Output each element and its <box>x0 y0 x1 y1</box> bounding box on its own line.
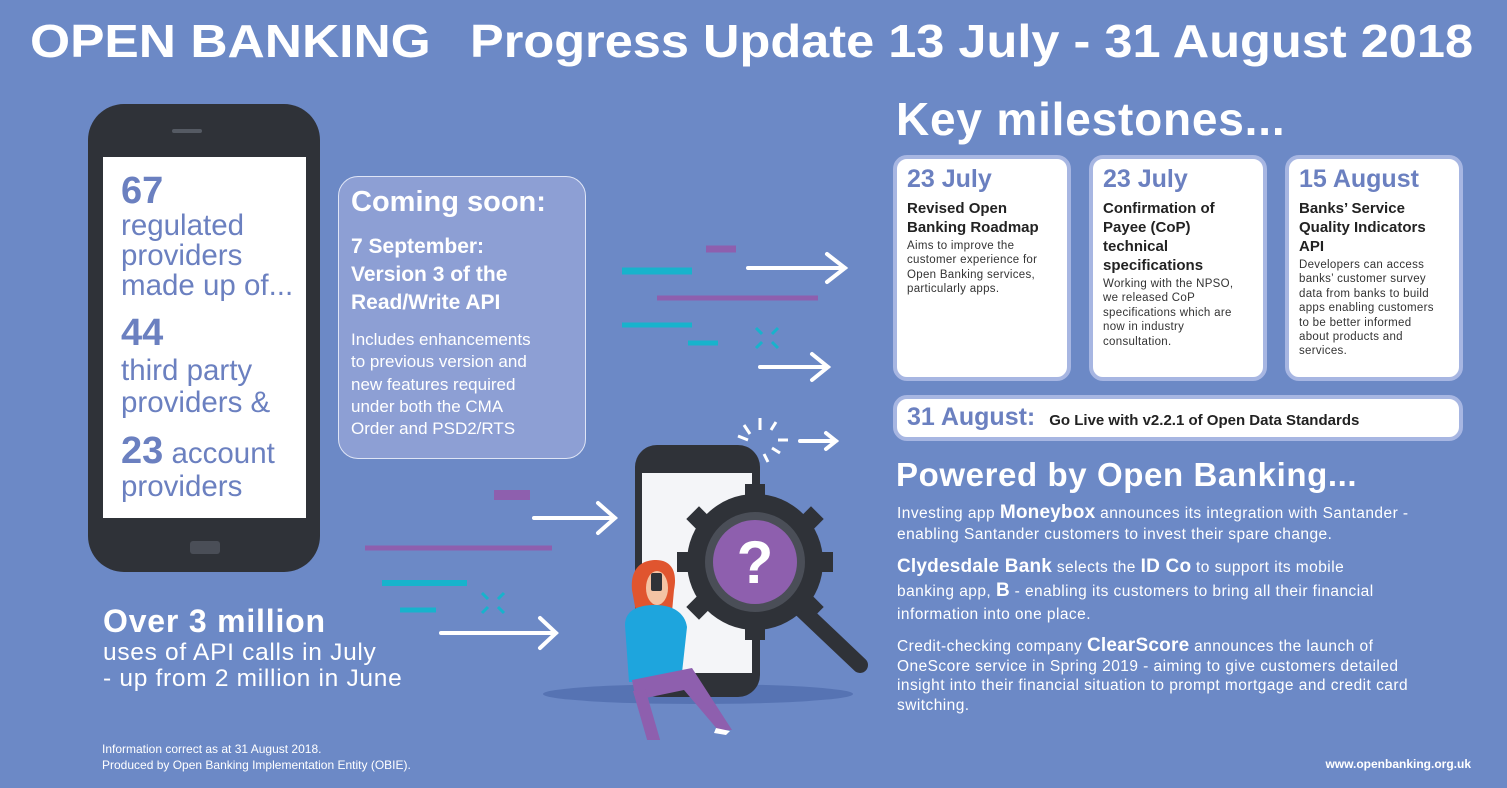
panel: coming soon <box>338 176 586 459</box>
text: powered by items <box>897 502 1409 714</box>
card: 23 July CoP: Payee (CoP) <box>1103 219 1191 236</box>
text: powered by items: enabling Santander customers to invest their spare change. <box>897 526 1332 543</box>
panel: coming soon: Order and PSD2/RTS <box>351 419 515 438</box>
card: 23 July roadmap: Aims to improve the <box>907 240 1014 252</box>
card: 15 August: 15 August <box>1299 165 1419 193</box>
stats text: 44 <box>121 312 163 354</box>
card: 15 August: data from banks to build <box>1299 288 1429 300</box>
panel: coming soon: under both the CMA <box>351 397 503 416</box>
footer note: Produced by Open Banking Implementation Entity (OBIE). <box>102 758 411 772</box>
stat: over 3 million: uses of API calls in July <box>103 639 377 666</box>
stat: over 3 million <box>103 603 402 692</box>
card: 23 July roadmap: customer experience for <box>907 254 1037 266</box>
stats text: 23 account <box>121 430 275 472</box>
card: 23 July roadmap: Open Banking services, <box>907 269 1035 281</box>
card: 15 August: to be better informed <box>1299 317 1411 329</box>
card: 15 August: Quality Indicators <box>1299 219 1426 236</box>
card: 15 August: banks’ customer survey <box>1299 273 1426 285</box>
stats text: providers <box>121 470 242 503</box>
text: powered by items: banking app, B - enabling its customers to bring all their financial <box>897 580 1374 601</box>
stat: over 3 million: - up from 2 million in June <box>103 665 402 692</box>
card: 23 July roadmap <box>893 155 1071 381</box>
panel: coming soon: Version 3 of the <box>351 263 507 286</box>
card: 23 July CoP: 23 July <box>1103 165 1188 193</box>
card: 15 August: apps enabling customers <box>1299 302 1434 314</box>
card: 15 August: Developers can access <box>1299 259 1424 271</box>
card: 31 August <box>893 395 1463 441</box>
stats text: providers & <box>121 386 270 419</box>
card: 23 July CoP: specifications <box>1103 257 1203 274</box>
stats text: 67 <box>121 170 163 212</box>
text: powered by items: Clydesdale Bank selects the ID Co to support its mobile <box>897 556 1344 577</box>
text: powered by items: Investing app Moneybox announces its integration with Santander - <box>897 502 1409 523</box>
title: OPEN BANKING <box>30 15 431 67</box>
card: 23 July roadmap: particularly apps. <box>907 283 999 295</box>
card: 23 July roadmap: 23 July <box>907 165 992 193</box>
panel: coming soon: to previous version and <box>351 352 527 371</box>
card: 15 August: Banks’ Service <box>1299 200 1405 217</box>
text: powered by items: Credit-checking company ClearScore announces the launch of <box>897 635 1373 656</box>
card: 31 August: 31 August: Go Live with v2.2.1 of Open Data Standards <box>907 403 1359 431</box>
card: 23 July CoP: technical <box>1103 238 1168 255</box>
stats text: third party <box>121 354 252 387</box>
card: 15 August: about products and <box>1299 331 1403 343</box>
title <box>30 15 1473 67</box>
panel: coming soon: Read/Write API <box>351 291 500 314</box>
card: 15 August: services. <box>1299 345 1347 357</box>
card: 23 July CoP: now in industry <box>1103 321 1184 333</box>
card: 23 July CoP <box>1089 155 1267 381</box>
stats text: made up of... <box>121 269 293 302</box>
card: 23 July CoP: specifications which are <box>1103 307 1232 319</box>
text: powered by items: insight into their financial situation to prompt mortgage and credit card <box>897 677 1408 694</box>
card: 23 July roadmap: Revised Open <box>907 200 1007 217</box>
illustration: woman with phone and magnifier <box>543 445 868 740</box>
card: 23 July CoP: Working with the NPSO, <box>1103 278 1233 290</box>
card: 23 July roadmap: Banking Roadmap <box>907 219 1039 236</box>
footer url: www.openbanking.org.uk <box>1325 757 1471 771</box>
card: 23 July CoP: consultation. <box>1103 336 1171 348</box>
card: 23 July CoP: we released CoP <box>1103 292 1195 304</box>
stats text: regulated <box>121 209 244 242</box>
stats text: providers <box>121 239 242 272</box>
panel: coming soon: new features required <box>351 375 515 394</box>
illustration: woman with phone and magnifier: ? <box>737 529 773 596</box>
phone: stats <box>88 104 320 572</box>
text: powered by items: OneScore service in Spring 2019 - aiming to give customers detailed <box>897 658 1398 674</box>
panel: coming soon: Includes enhancements <box>351 330 531 349</box>
card: 15 August: API <box>1299 238 1324 255</box>
panel: coming soon: Coming soon: <box>351 186 546 218</box>
panel: coming soon: 7 September: <box>351 235 484 258</box>
text: powered by items: information into one place. <box>897 606 1091 623</box>
footer note: Information correct as at 31 August 2018. <box>102 742 321 756</box>
footer note <box>102 742 411 772</box>
heading: key milestones: Key milestones... <box>896 93 1285 145</box>
stat: over 3 million: Over 3 million <box>103 603 326 639</box>
card: 15 August <box>1285 155 1463 381</box>
heading: powered by: Powered by Open Banking... <box>896 456 1357 493</box>
stats text <box>103 157 306 518</box>
text: powered by items: switching. <box>897 696 970 714</box>
title: Progress Update 13 July - 31 August 2018 <box>470 15 1473 67</box>
card: 23 July CoP: Confirmation of <box>1103 200 1215 217</box>
